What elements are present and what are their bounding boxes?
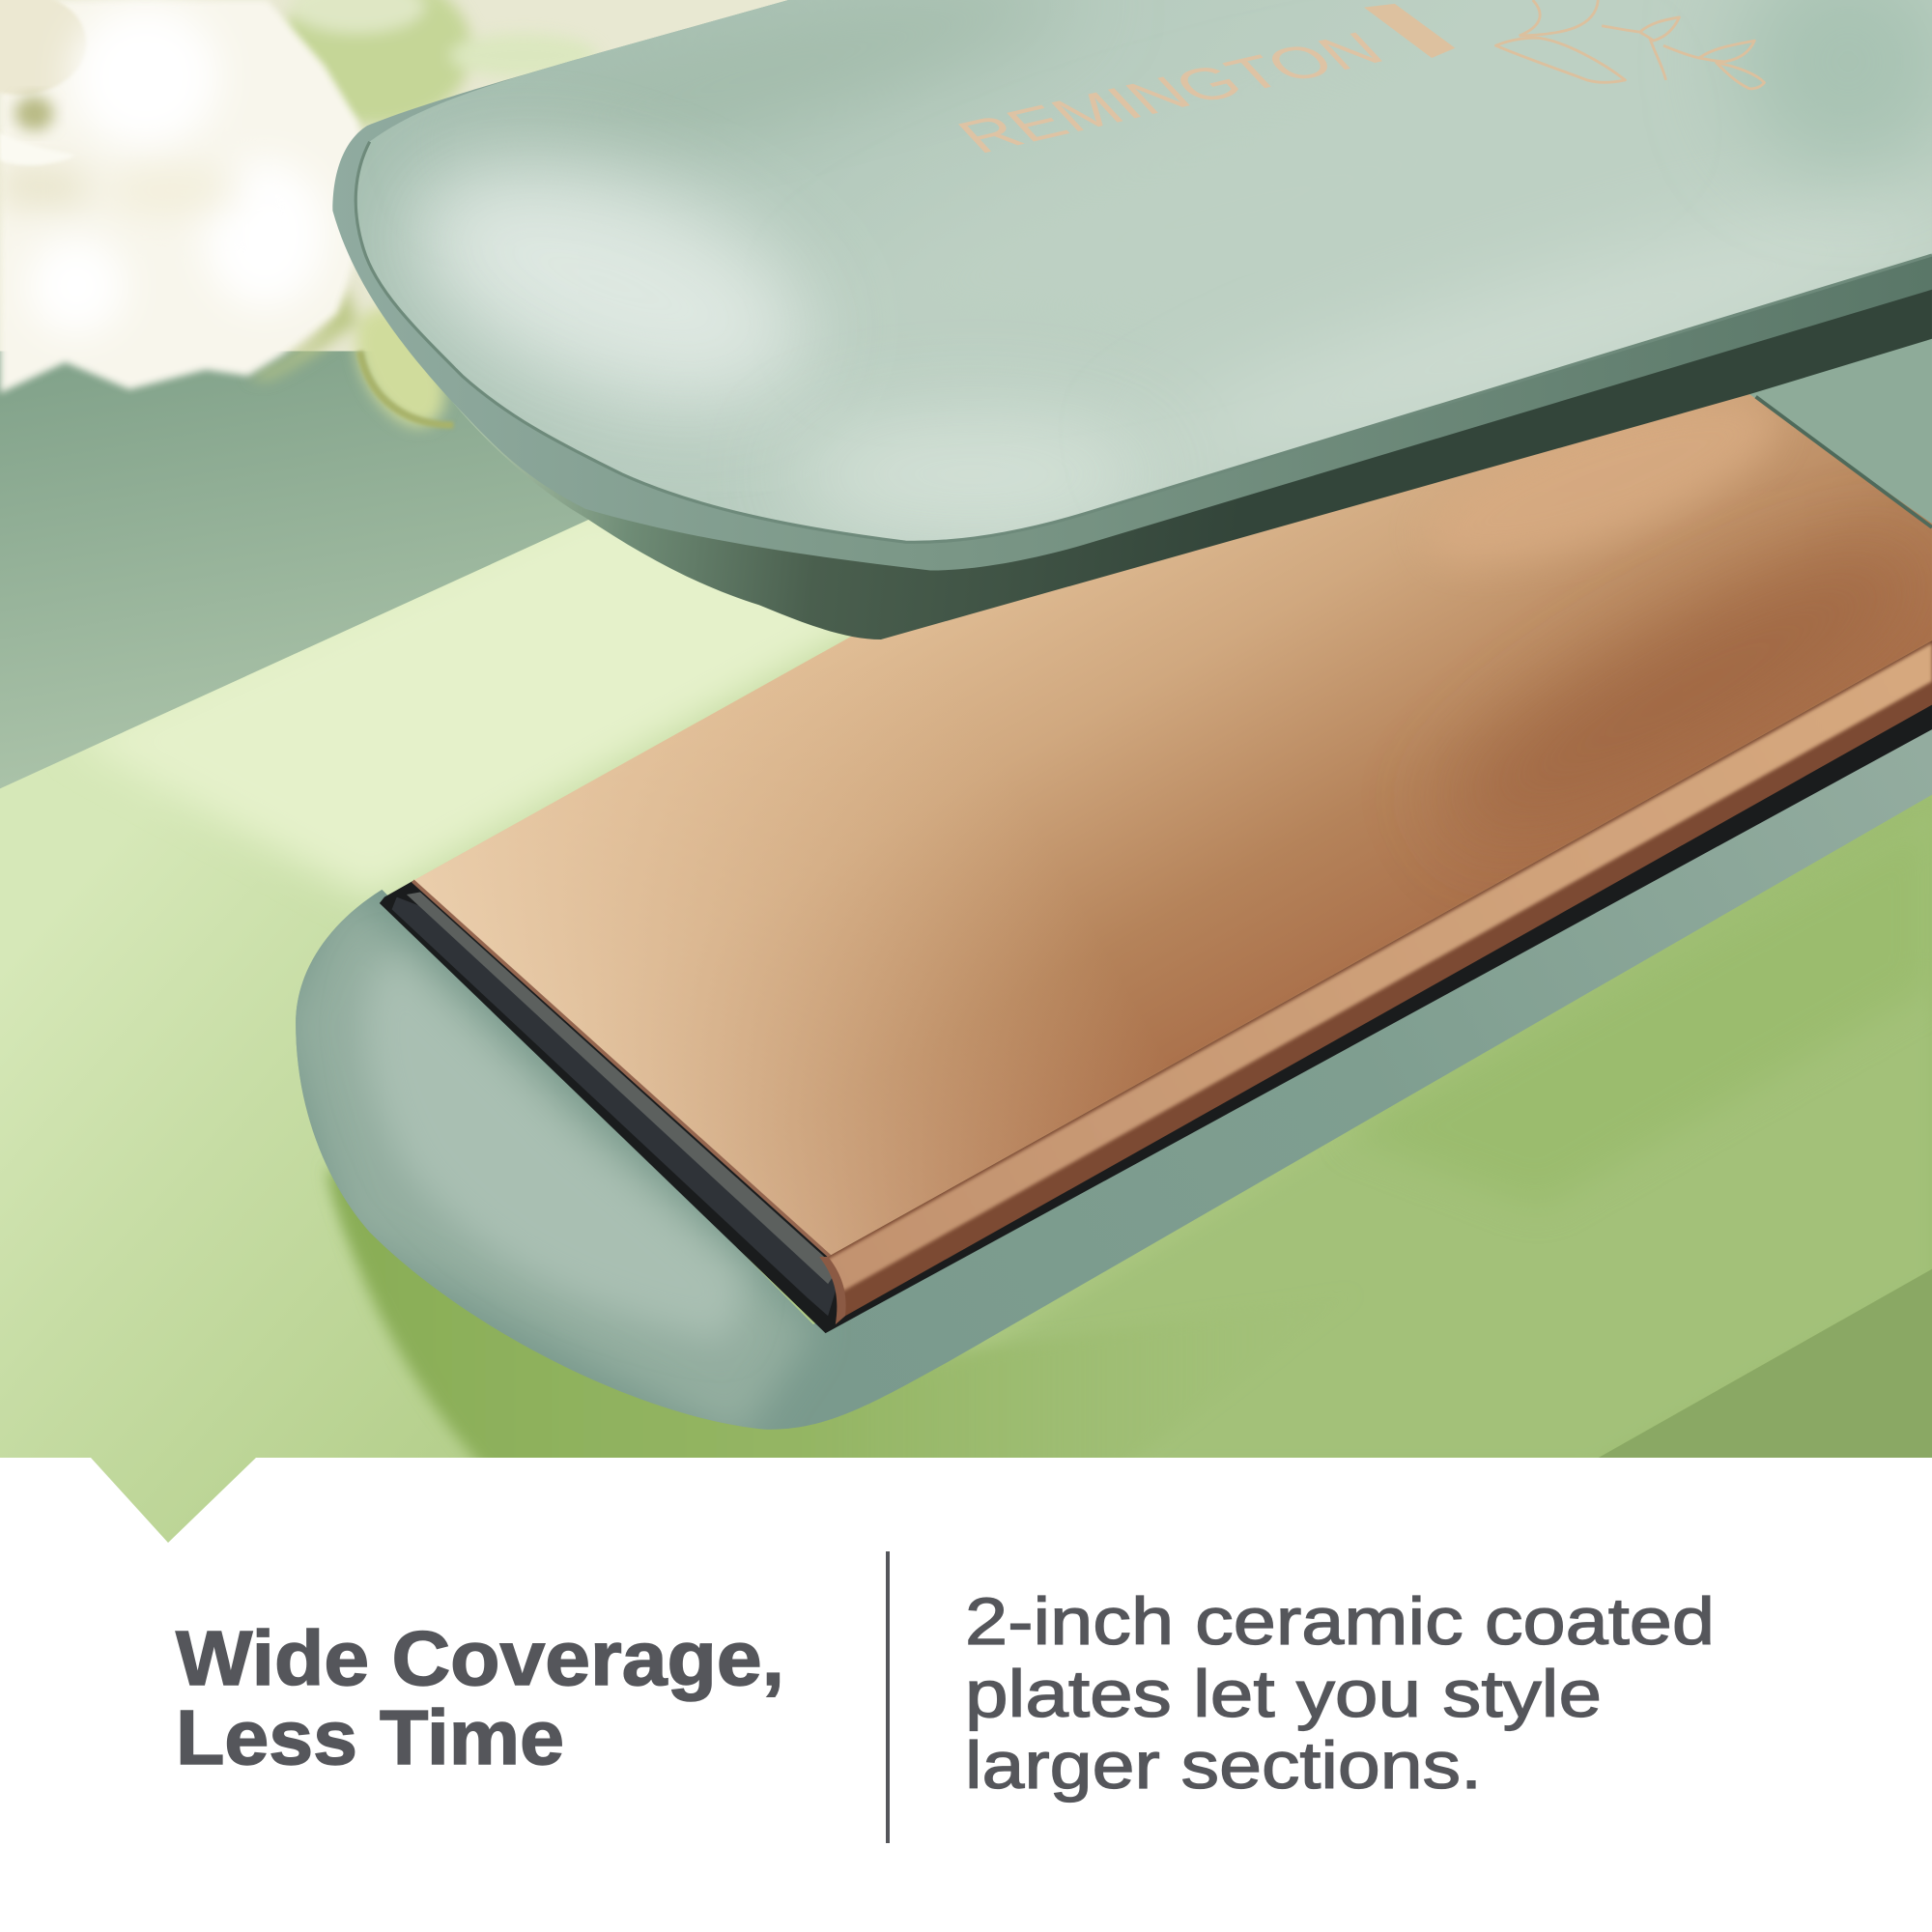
heading: Less Time bbox=[176, 1694, 564, 1780]
plate: base gradient bbox=[415, 394, 1932, 1255]
logo: bar bbox=[1364, 4, 1455, 58]
upper shell: groove line bbox=[355, 142, 1932, 542]
flowers bbox=[0, 0, 598, 441]
upper shell: lit band at right bbox=[1136, 157, 1932, 508]
plate: front bevel bbox=[828, 643, 1932, 1292]
background: top wall bbox=[0, 0, 985, 394]
ceramic plate bbox=[370, 332, 1932, 1324]
lower body: end cap base tone bbox=[283, 887, 813, 1441]
lower body: recess bbox=[380, 640, 1932, 1333]
plate: warm glow at upper right bbox=[1463, 409, 1766, 556]
upper shell: outer lip bbox=[332, 0, 1932, 571]
gasket: lit edge bbox=[407, 892, 838, 1284]
logo: floral line art bbox=[1495, 0, 1765, 89]
plate: light left zone bbox=[415, 781, 1105, 1255]
block: lower right face bbox=[1583, 1269, 1932, 1466]
flower: small petal bbox=[0, 133, 76, 165]
flower: back bloom bbox=[0, 0, 86, 95]
flower: green buds bbox=[247, 0, 598, 441]
upper shell: lower highlight bbox=[788, 412, 1158, 536]
upper shell: centre tone bbox=[817, 21, 1647, 398]
brand logo bbox=[945, 0, 1765, 163]
lower body: lighting bbox=[283, 887, 813, 1441]
plate: dim copper at right bbox=[1459, 535, 1906, 825]
upper shell: right shade bbox=[1737, 0, 1932, 173]
panel: white background with notch bbox=[0, 1458, 1932, 1932]
body text: larger sections. bbox=[965, 1728, 1482, 1803]
body text: plates let you style bbox=[965, 1657, 1602, 1731]
block: right texture bbox=[1343, 813, 1932, 1208]
upper shell: dark underside bbox=[452, 246, 1932, 639]
heading: Wide Coverage, bbox=[176, 1615, 784, 1701]
flower: white petals bbox=[0, 0, 370, 393]
plate: back wall shadow line bbox=[1756, 397, 1932, 527]
flower: olive centre bbox=[14, 96, 54, 130]
divider bbox=[886, 1551, 890, 1843]
highlight: block top bbox=[99, 520, 851, 904]
upper shell: lighting bbox=[378, 0, 1932, 536]
heading bbox=[176, 1615, 784, 1780]
body text: 2-inch ceramic coated bbox=[965, 1584, 1715, 1659]
flower: bud rim bbox=[359, 352, 453, 425]
upper shell: left highlight bbox=[378, 113, 842, 453]
logo: wordmark: REMINGTON bbox=[945, 22, 1396, 163]
upper shell: top shade bbox=[443, 0, 1085, 198]
shadow: under iron on block bbox=[327, 813, 1932, 1466]
plate: front bevel shadow bbox=[828, 640, 1932, 1316]
iron upper shell bbox=[332, 0, 1932, 639]
plate: bevel corner bbox=[819, 1257, 846, 1324]
plate: left edge bbox=[412, 881, 833, 1260]
plate: back sage wall bbox=[1749, 332, 1932, 524]
background: sage block bbox=[0, 352, 764, 850]
flower: petal detail bbox=[0, 5, 327, 335]
background: light green block bbox=[0, 370, 1932, 1552]
body text bbox=[965, 1584, 1715, 1803]
caption panel bbox=[0, 1458, 1932, 1932]
iron lower body bbox=[283, 640, 1932, 1441]
upper shell: top face bbox=[355, 0, 1932, 542]
lower body: end cap highlight bbox=[363, 949, 745, 1343]
lower body: shell bbox=[296, 727, 1932, 1430]
gasket: dark strip bbox=[392, 897, 840, 1316]
plate: top surface bbox=[415, 394, 1932, 1256]
shadow: contact under iron bbox=[330, 1171, 1355, 1479]
highlight shape bbox=[99, 520, 851, 904]
